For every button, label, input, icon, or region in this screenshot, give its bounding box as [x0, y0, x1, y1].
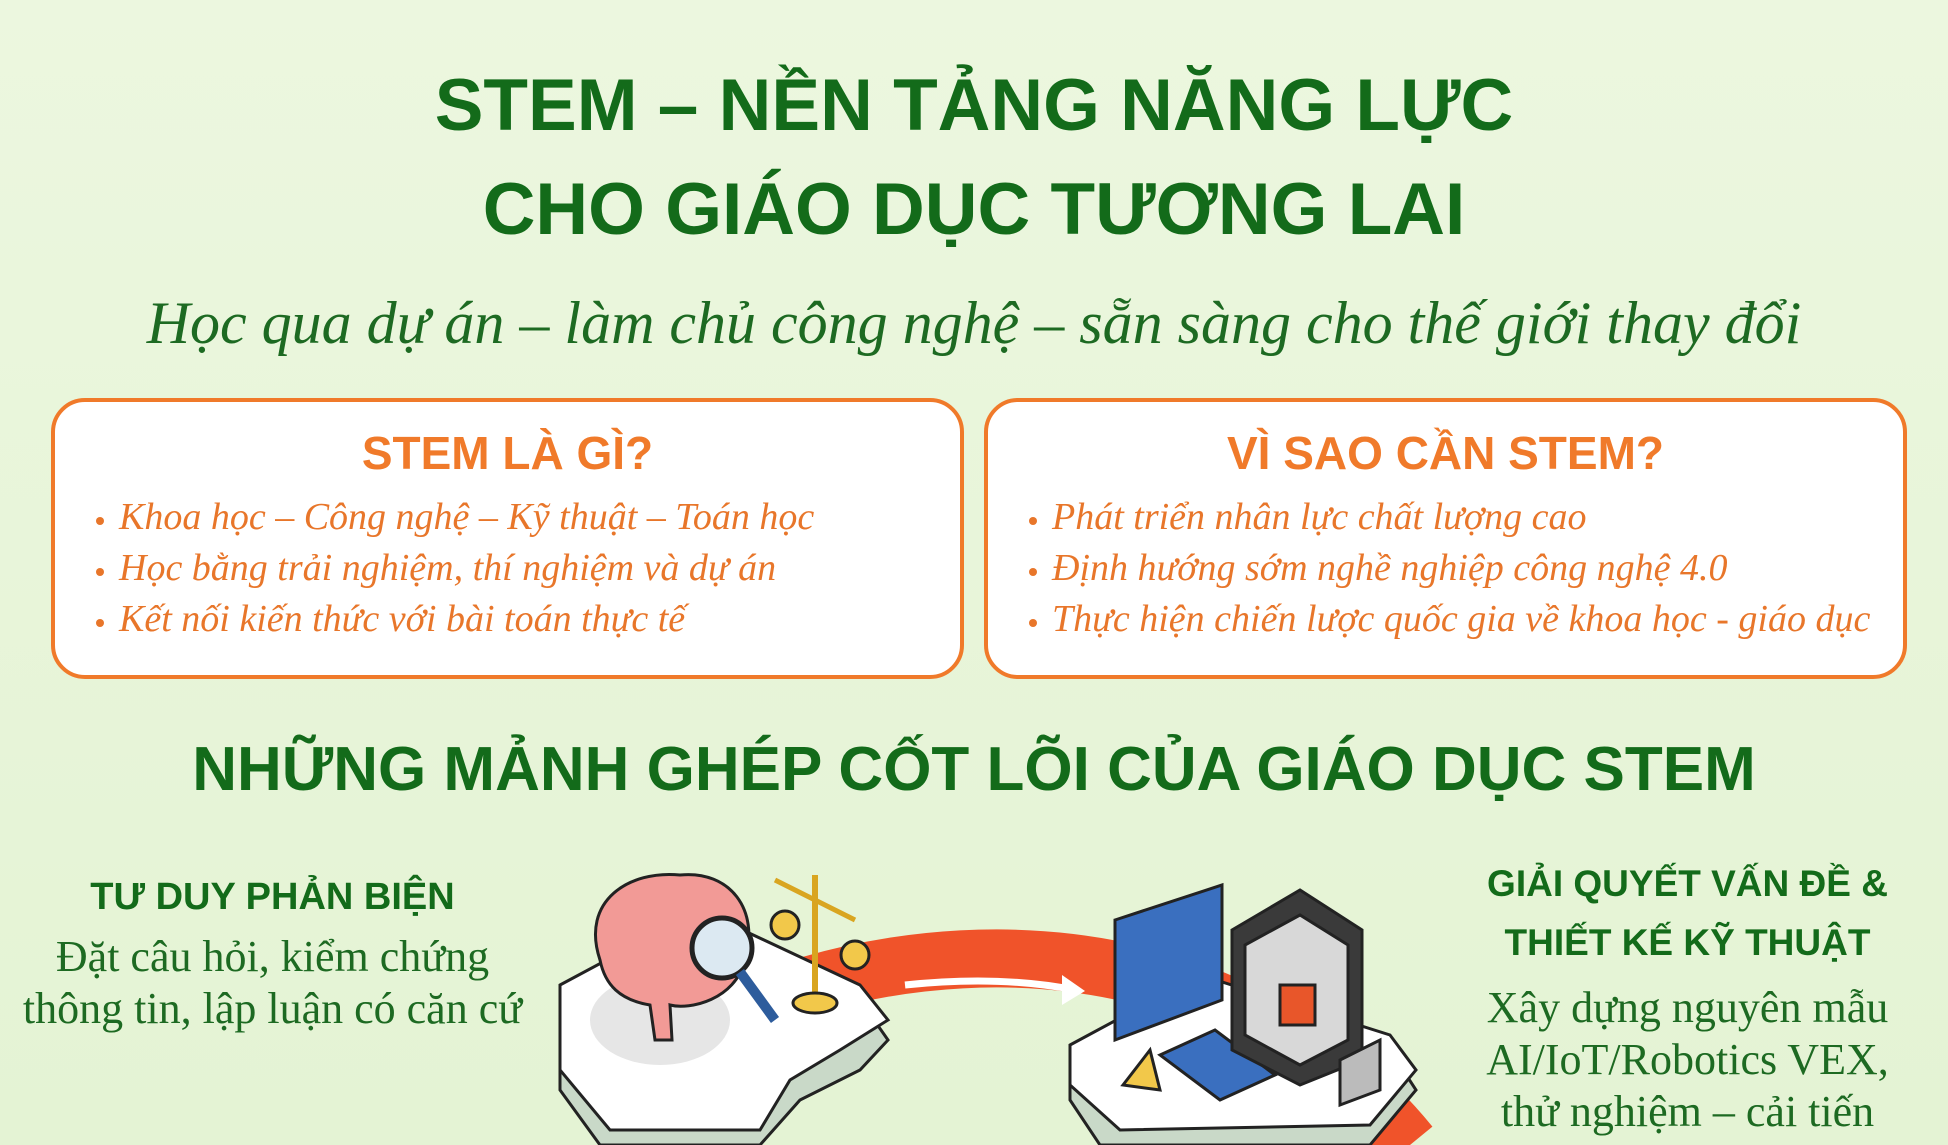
text: tư duy phản biện [23, 874, 524, 1033]
title: CHO GIÁO DỤC TƯƠNG LAI [483, 169, 1465, 250]
text: tư duy phản biện: Đặt câu hỏi, kiểm chứng [56, 932, 489, 981]
panel: Vì sao cần STEM: Phát triển nhân lực chất lượng cao [1052, 496, 1587, 538]
title [435, 64, 1513, 250]
text: tư duy phản biện: thông tin, lập luận có căn cứ [23, 984, 522, 1033]
panel: STEM là gì: Kết nối kiến thức với bài toán thực tế [119, 598, 685, 640]
title: STEM – NỀN TẢNG NĂNG LỰC [435, 65, 1513, 146]
icon: right puzzle with blueprint and 3D printer [1070, 885, 1416, 1145]
panel: STEM là gì: Học bằng trải nghiệm, thí nghiệm và dự án [119, 547, 776, 589]
icon: left puzzle with brain [560, 874, 888, 1145]
text: giải quyết vấn đề: Xây dựng nguyên mẫu [1487, 983, 1888, 1032]
text: giải quyết vấn đề: GIẢI QUYẾT VẤN ĐỀ & [1487, 863, 1888, 904]
panel: Vì sao cần STEM: VÌ SAO CẦN STEM? [1227, 427, 1664, 479]
panel: Vì sao cần STEM: Định hướng sớm nghề nghiệp công nghệ 4.0 [1052, 547, 1728, 589]
panel: Vì sao cần STEM: Thực hiện chiến lược quốc gia về khoa học - giáo dục [1052, 598, 1870, 640]
panel: STEM là gì [51, 398, 964, 679]
arrow: orange arc [810, 958, 1410, 1145]
panel: STEM là gì: Khoa học – Công nghệ – Kỹ thuật – Toán học [119, 496, 814, 538]
text: tư duy phản biện: TƯ DUY PHẢN BIỆN [90, 876, 455, 918]
panel: Vì sao cần STEM [984, 398, 1907, 679]
text: giải quyết vấn đề: THIẾT KẾ KỸ THUẬT [1505, 922, 1870, 963]
text: giải quyết vấn đề [1486, 862, 1889, 1136]
text: giải quyết vấn đề: thử nghiệm – cải tiến [1501, 1087, 1874, 1136]
section heading: NHỮNG MẢNH GHÉP CỐT LÕI CỦA GIÁO DỤC STEM [192, 735, 1756, 804]
text: giải quyết vấn đề: AI/IoT/Robotics VEX, [1486, 1035, 1889, 1084]
panel: STEM là gì: STEM LÀ GÌ? [362, 427, 653, 479]
subtitle: Học qua dự án – làm chủ công nghệ – sẵn sàng cho thế giới thay đổi [147, 290, 1801, 356]
